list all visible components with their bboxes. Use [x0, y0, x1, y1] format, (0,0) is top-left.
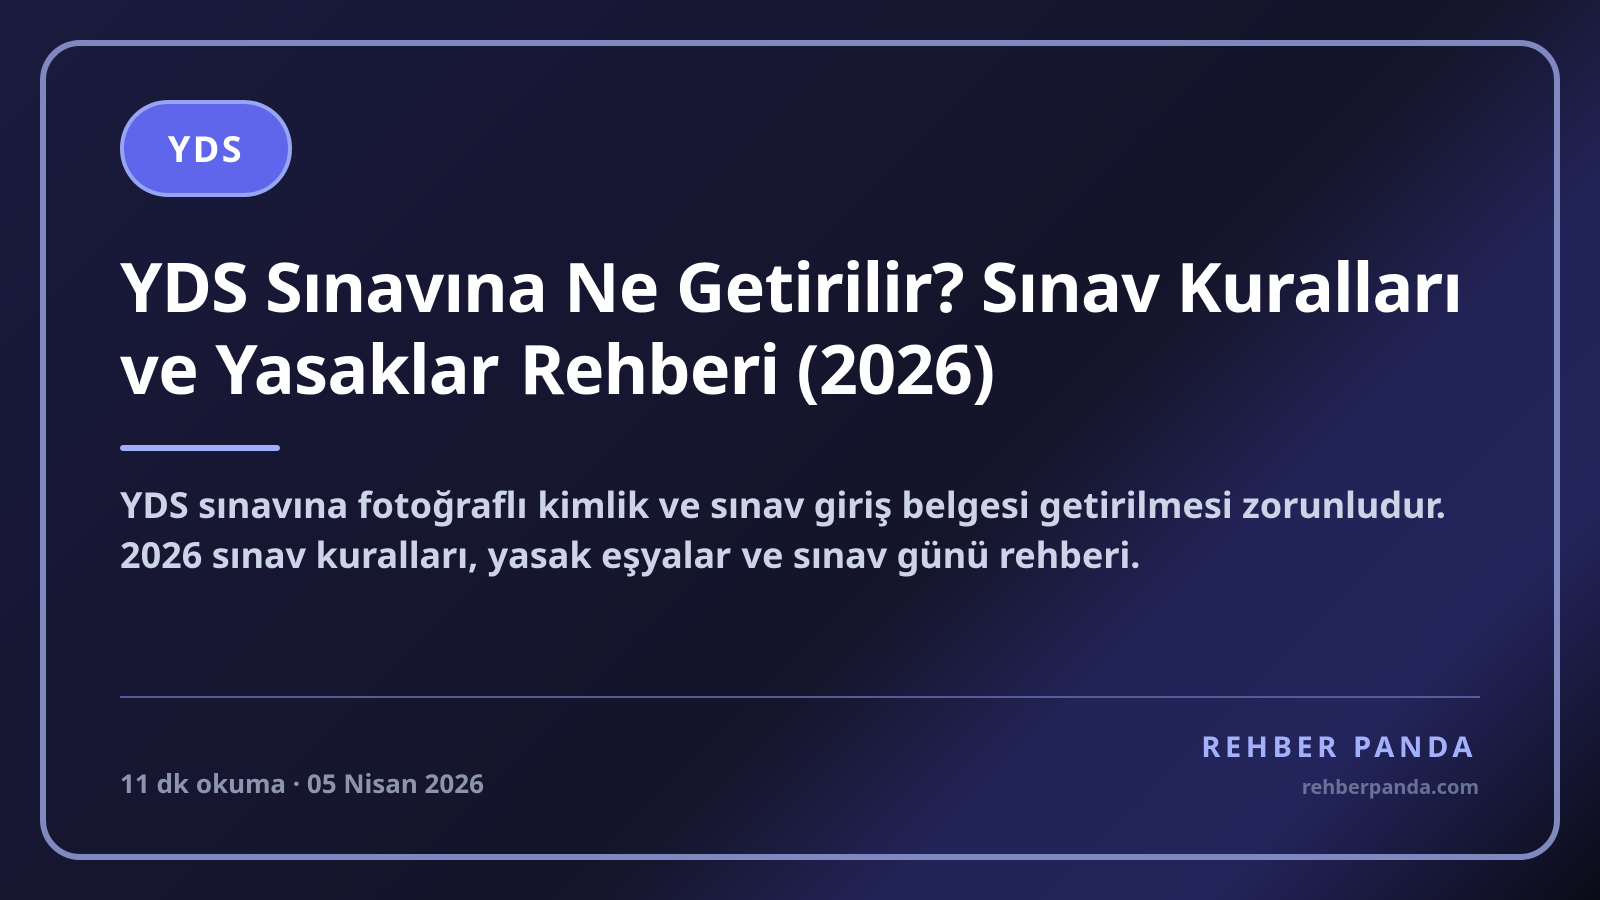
- description: YDS sınavına fotoğraflı kimlik ve sınav giriş belgesi getirilmesi zorunludur.: [120, 480, 1446, 529]
- domain: rehberpanda.com: [1302, 773, 1479, 800]
- title: YDS Sınavına Ne Getirilir? Sınav Kuralları: [120, 239, 1462, 332]
- reading time and date: 11 dk okuma · 05 Nisan 2026: [120, 765, 484, 801]
- description: [120, 480, 1446, 579]
- footer divider: [120, 696, 1480, 698]
- title: ve Yasaklar Rehberi (2026): [120, 321, 995, 414]
- title: [120, 239, 1462, 414]
- description: 2026 sınav kuralları, yasak eşyalar ve sınav günü rehberi.: [120, 530, 1140, 579]
- accent bar: [120, 445, 280, 451]
- category badge: [120, 100, 292, 197]
- brand name: REHBER PANDA: [1201, 727, 1477, 766]
- category badge: YDS: [168, 124, 244, 173]
